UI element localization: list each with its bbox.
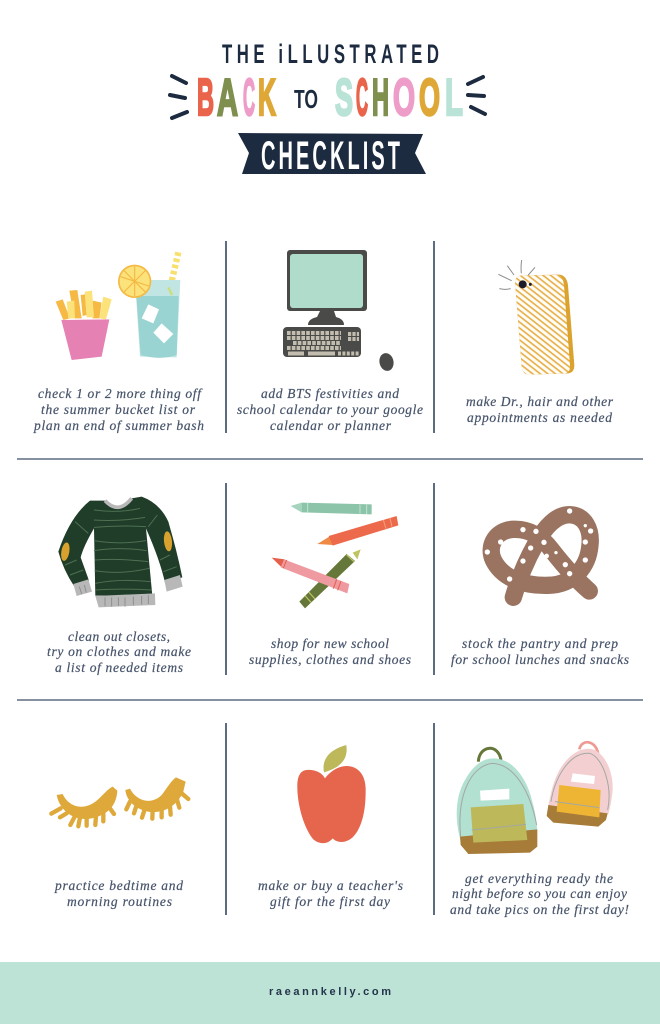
heading: back to school: TO xyxy=(294,84,318,114)
caption: calendar or planner xyxy=(270,418,392,433)
icon: computer xyxy=(283,250,367,357)
heading: back to school: O xyxy=(419,69,440,127)
panel: calendar xyxy=(237,250,423,433)
heading: back to school: H xyxy=(372,69,389,127)
caption: get everything ready the xyxy=(465,871,613,886)
caption: school calendar to your google xyxy=(237,402,423,417)
panel: summer bucket list xyxy=(33,252,204,433)
caption: morning routines xyxy=(67,894,172,909)
heading: back to school: C xyxy=(356,69,368,127)
caption: plan an end of summer bash xyxy=(33,418,204,433)
icon: sweater xyxy=(58,497,183,607)
panel: closets xyxy=(47,497,191,675)
caption: and take pics on the first day! xyxy=(450,902,629,917)
rays: right of heading xyxy=(468,77,485,114)
caption: add BTS festivities and xyxy=(261,386,399,401)
caption xyxy=(54,878,183,909)
banner: checklist: CHECKLIST xyxy=(261,132,400,178)
panel: pantry xyxy=(451,508,629,667)
heading: the illustrated: THE iLLUSTRATED xyxy=(222,39,439,69)
caption: practice bedtime and xyxy=(54,878,183,893)
heading: back to school: O xyxy=(393,69,415,127)
caption: a list of needed items xyxy=(55,660,183,675)
caption: make Dr., hair and other xyxy=(466,394,614,409)
icon: lemonade glass xyxy=(118,252,180,358)
caption: make or buy a teacher's xyxy=(258,878,403,893)
heading: back to school: C xyxy=(243,69,255,127)
caption: appointments as needed xyxy=(467,410,612,425)
icon: fries xyxy=(56,290,112,360)
caption xyxy=(249,636,411,667)
caption: night before so you can enjoy xyxy=(452,886,627,901)
caption: gift for the first day xyxy=(270,894,390,909)
icon: large backpack xyxy=(457,748,537,854)
footer xyxy=(0,962,660,1024)
caption: for school lunches and snacks xyxy=(451,652,629,667)
heading: back to school: A xyxy=(217,69,238,127)
caption: stock the pantry and prep xyxy=(462,636,618,651)
heading: back to school: B xyxy=(197,69,214,127)
icon: eyelashes xyxy=(51,777,188,826)
caption: clean out closets, xyxy=(68,629,170,644)
caption: check 1 or 2 more thing off xyxy=(38,386,203,401)
caption: try on clothes and make xyxy=(47,644,191,659)
panel: teacher gift xyxy=(258,745,403,909)
icon: small backpack xyxy=(547,742,613,827)
grid dividers xyxy=(17,241,643,915)
caption xyxy=(33,386,204,433)
caption xyxy=(466,394,614,425)
panel: routines xyxy=(51,777,188,909)
heading: back to school: L xyxy=(445,69,463,127)
heading: back to school xyxy=(197,69,463,127)
title xyxy=(170,39,485,178)
caption xyxy=(47,629,191,675)
caption xyxy=(450,871,629,917)
icon: crayons xyxy=(272,503,398,608)
caption xyxy=(237,386,423,433)
heading: back to school: S xyxy=(335,69,353,127)
caption xyxy=(451,636,629,667)
caption: shop for new school xyxy=(271,636,389,651)
icon: phone xyxy=(498,260,574,375)
panel: appointments xyxy=(466,260,614,425)
heading: back to school: K xyxy=(258,69,276,127)
footer: raeannkelly.com xyxy=(269,986,391,998)
caption: the summer bucket list or xyxy=(41,402,196,417)
icon: mouse xyxy=(378,352,395,372)
icon: apple xyxy=(297,745,366,843)
caption: supplies, clothes and shoes xyxy=(249,652,411,667)
caption xyxy=(258,878,403,909)
rays: left of heading xyxy=(170,76,187,118)
panel: supplies xyxy=(249,503,411,667)
panel: first day xyxy=(450,742,629,917)
icon: pretzel xyxy=(485,508,593,597)
